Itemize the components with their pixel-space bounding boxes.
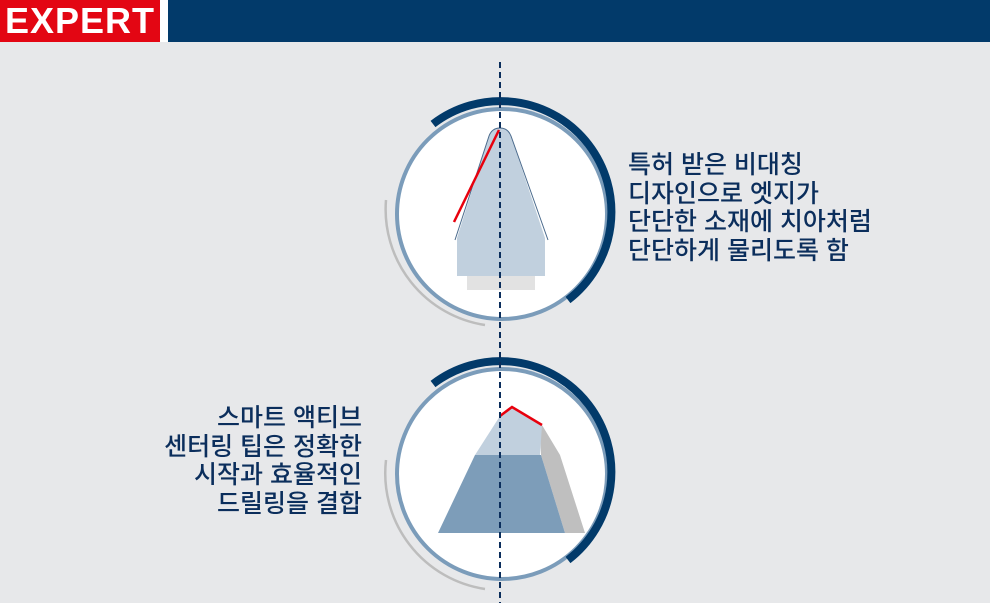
- text: smart active centering: 시작과 효율적인: [194, 461, 362, 489]
- circle 1: [386, 101, 611, 325]
- header band: [168, 0, 990, 42]
- drill tip icon: [454, 128, 548, 290]
- logo: EXPERT: EXPERT: [5, 0, 155, 41]
- header bar: [0, 0, 990, 42]
- text: smart active centering: 센터링 팁은 정확한: [164, 432, 362, 460]
- text: asymmetric design: 디자인으로 엣지가: [628, 180, 819, 208]
- text: asymmetric design: 단단한 소재에 치아처럼: [628, 208, 872, 236]
- text: asymmetric design: 단단하게 물리도록 함: [628, 236, 849, 264]
- center axis dashed line: [499, 62, 501, 603]
- text: asymmetric design: 특허 받은 비대칭: [628, 151, 803, 179]
- text: smart active centering: [164, 404, 362, 518]
- text: smart active centering: 스마트 액티브: [217, 404, 362, 432]
- circle 2: [385, 361, 611, 589]
- text: smart active centering: 드릴링을 결합: [217, 490, 362, 518]
- centering tip icon: [438, 407, 585, 533]
- text: asymmetric design: [628, 151, 872, 264]
